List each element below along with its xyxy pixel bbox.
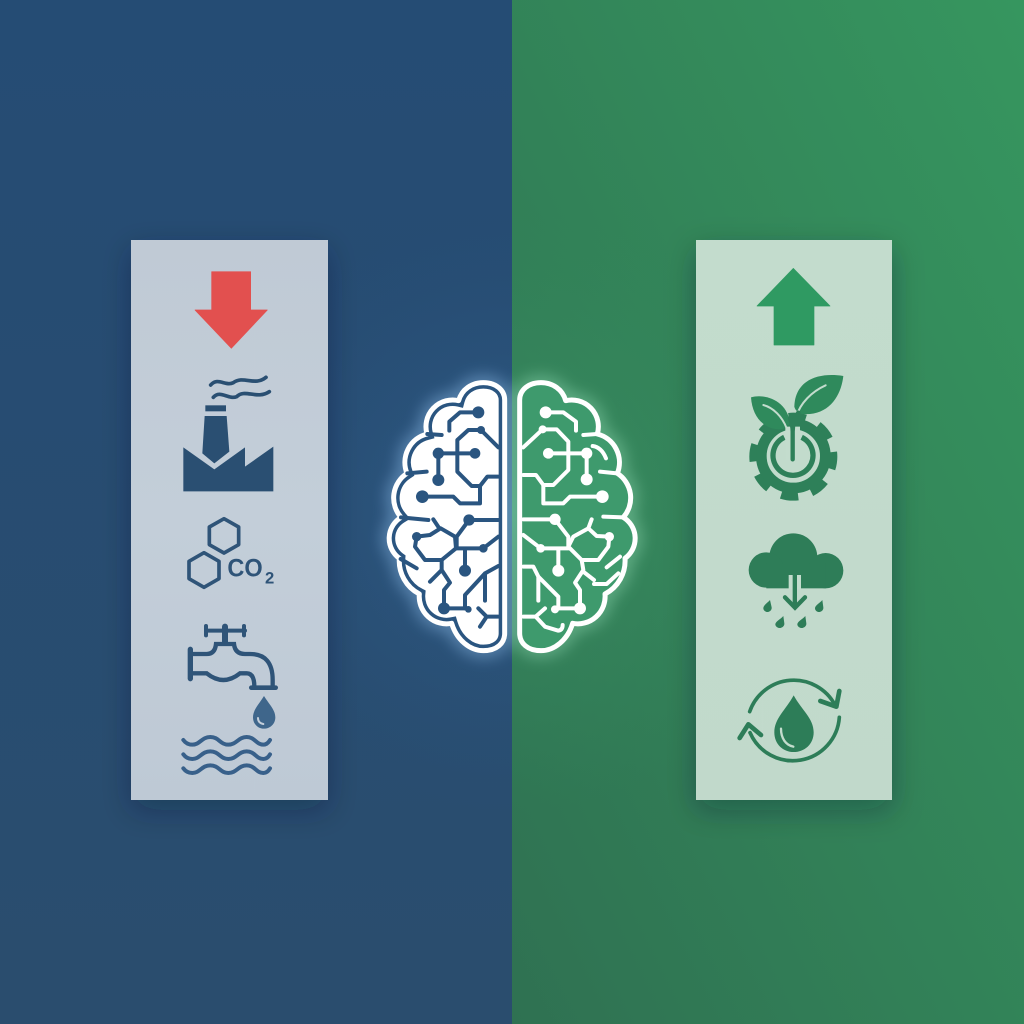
icon: plant growing from gear (749, 375, 843, 500)
icon: green up arrow (757, 268, 830, 345)
icon: water waves (183, 737, 270, 773)
icon: falling water drop (253, 696, 275, 729)
background: green right half (512, 0, 1024, 1024)
brain: right glow (520, 383, 635, 651)
icon: water cycle (740, 680, 839, 761)
circuit: right traces (523, 412, 623, 631)
circuit: left nodes (412, 406, 488, 614)
icon: hexagons with CO2 label: CO (227, 555, 263, 583)
panel: decrease (left) (131, 240, 328, 800)
icon: water tap (190, 626, 276, 688)
brain: right hemisphere, green with white circuit (520, 383, 635, 651)
icon: factory with smoke (183, 377, 273, 491)
icon: red down arrow (195, 272, 267, 348)
background: blue left half (0, 0, 512, 1024)
brain: left glow (389, 383, 505, 651)
circuit: right nodes (536, 406, 614, 614)
icon: cloud with rain and down arrow (749, 533, 843, 628)
icon: hexagons with CO2 label: 2 (265, 568, 274, 587)
brain: left hemisphere, white with blue circuit (389, 383, 505, 651)
icon: hexagons with CO2 label (189, 519, 274, 587)
panel: increase (right) (696, 240, 892, 800)
circuit: left traces (401, 412, 498, 627)
